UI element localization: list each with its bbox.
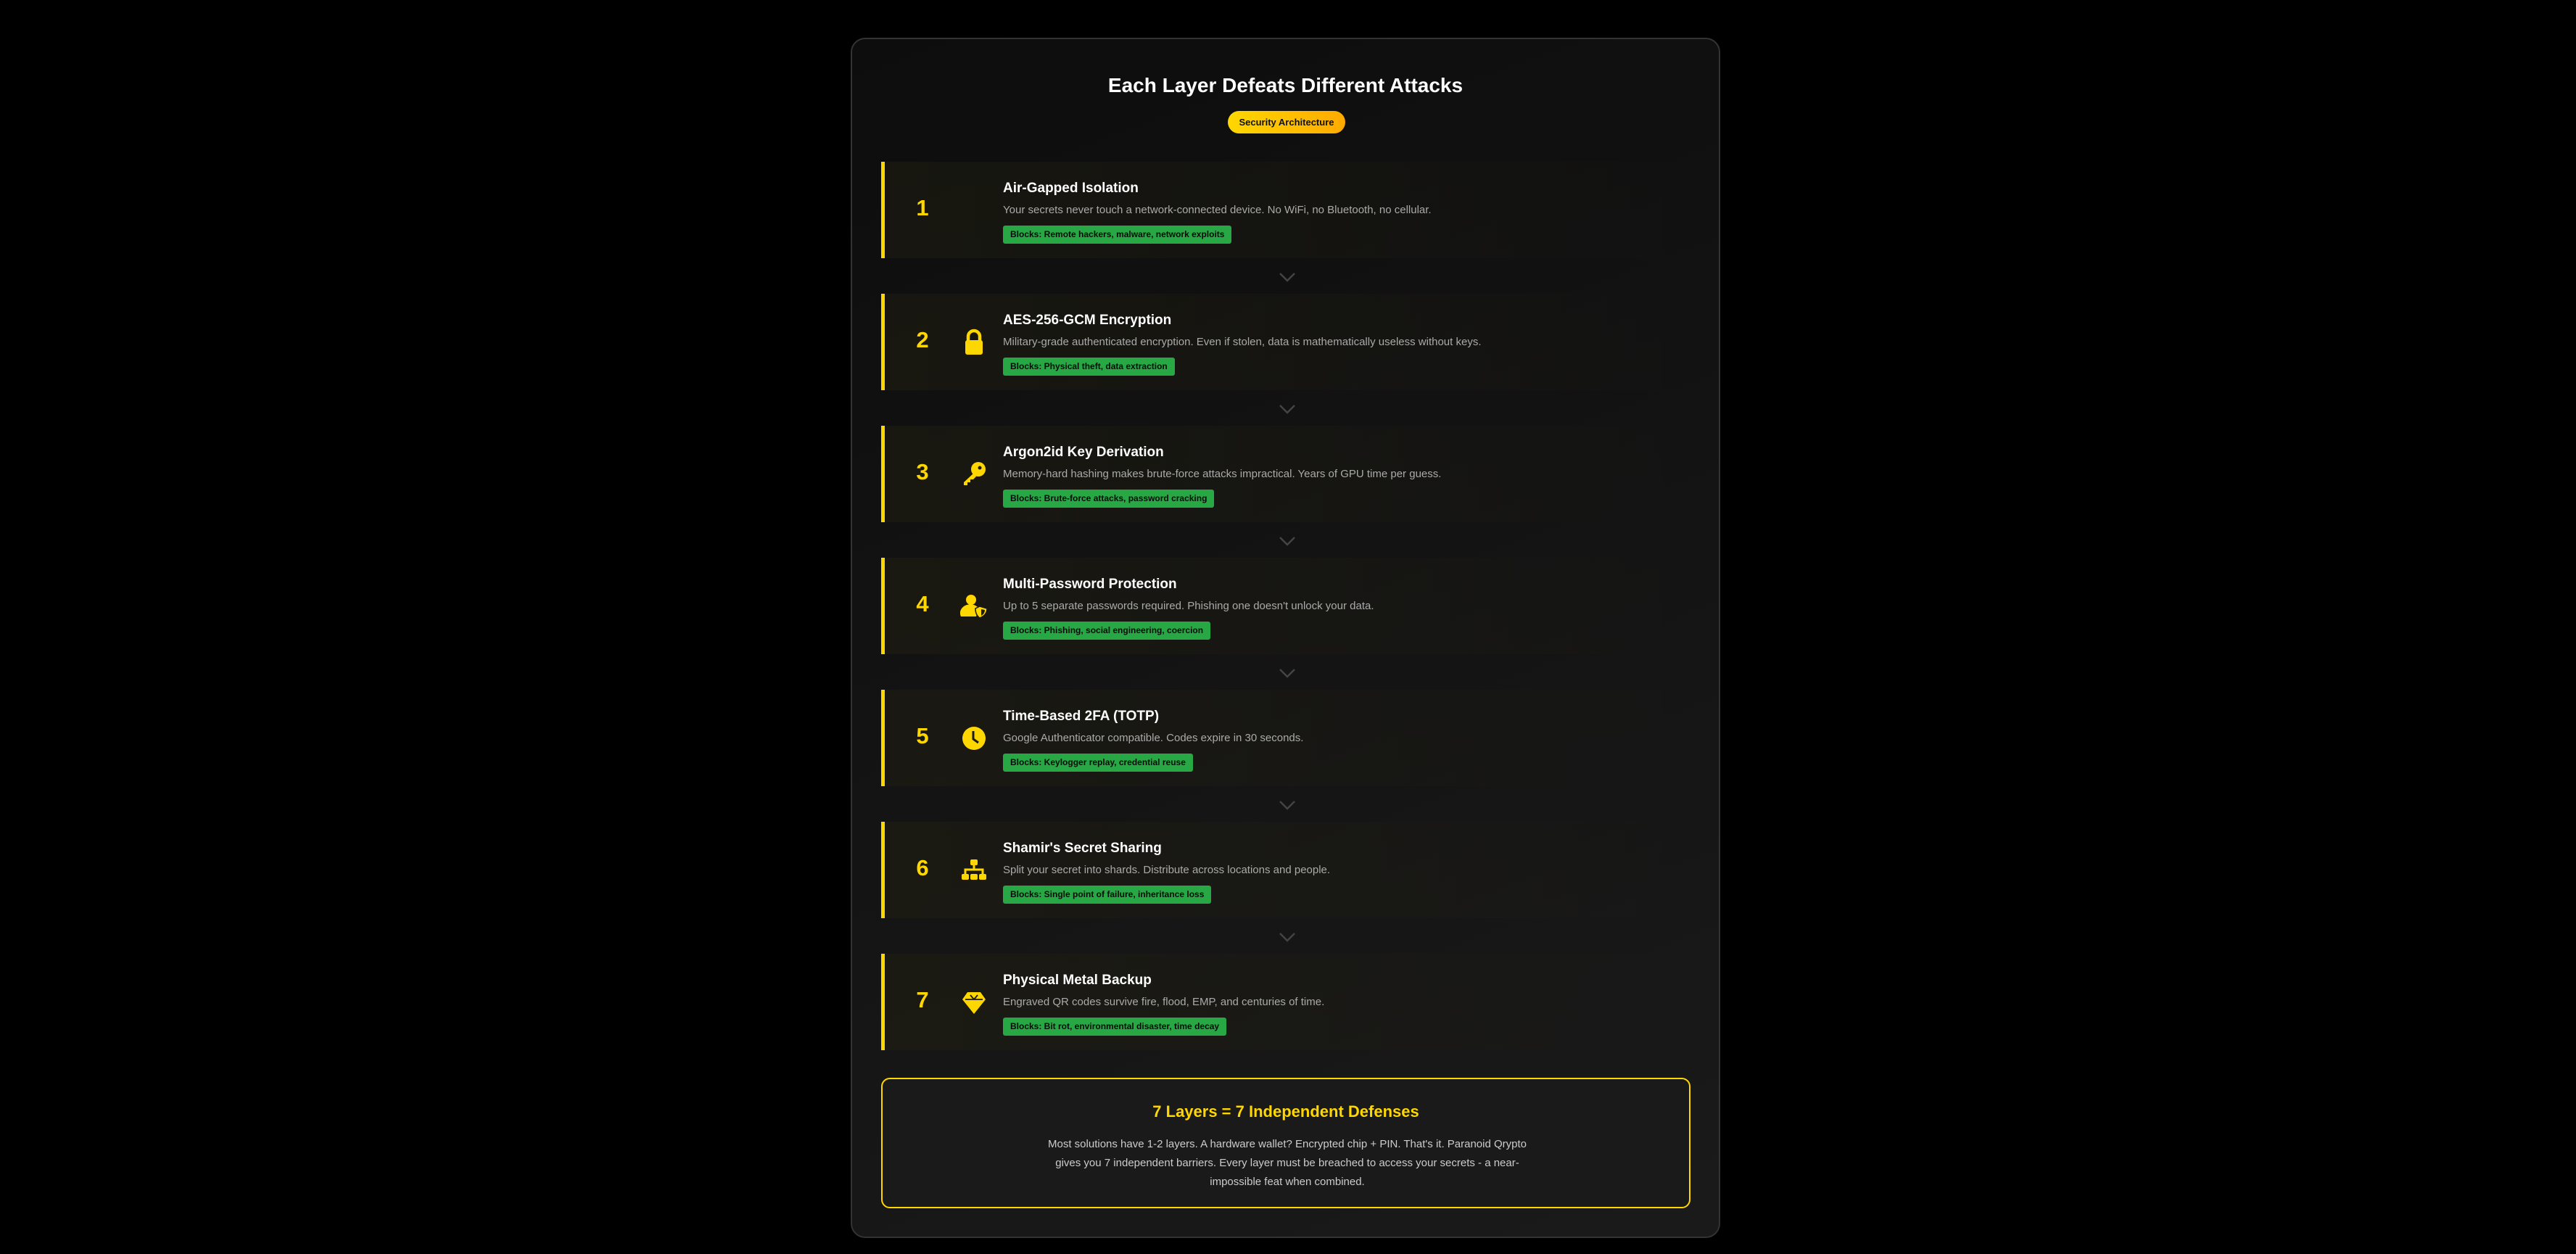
arrow	[1279, 537, 1295, 545]
number 6: 6	[916, 855, 929, 880]
number 3: 3	[916, 459, 929, 484]
layer 4 description: Up to 5 separate passwords required. Phishing one doesn't unlock your data.	[1003, 600, 1374, 612]
layer 1 tag: Blocks: Remote hackers, malware, network exploits	[1010, 229, 1224, 239]
arrow	[1279, 273, 1295, 281]
panel: summary callout	[881, 1078, 1690, 1208]
number 4: 4	[916, 591, 929, 616]
layer 2 tag: Blocks: Physical theft, data extraction	[1010, 361, 1168, 371]
arrow	[1279, 405, 1295, 413]
layer 5 tag	[1003, 754, 1193, 772]
arrow	[1279, 801, 1295, 809]
layer 2 description: Military-grade authenticated encryption. Even if stolen, data is mathematically useless without keys.	[1003, 336, 1481, 348]
layer 5 tag: Blocks: Keylogger replay, credential reuse	[1010, 757, 1186, 767]
icon: key	[964, 462, 986, 485]
layer 3 description: Memory-hard hashing makes brute-force attacks impractical. Years of GPU time per guess.	[1003, 468, 1441, 480]
badge	[1228, 111, 1345, 133]
layer 3 title: Argon2id Key Derivation	[1003, 445, 1164, 460]
layer 6	[881, 822, 1661, 918]
layer 3 tag: Blocks: Brute-force attacks, password cracking	[1010, 493, 1207, 503]
title: Each Layer Defeats Different Attacks	[1108, 74, 1463, 96]
layer 4 title: Multi-Password Protection	[1003, 577, 1177, 592]
layer 3	[881, 426, 1661, 522]
badge: Security Architecture	[1239, 117, 1334, 128]
layer 7 tag: Blocks: Bit rot, environmental disaster, time decay	[1010, 1021, 1219, 1031]
arrow	[1279, 933, 1295, 941]
layer 7 description: Engraved QR codes survive fire, flood, EMP, and centuries of time.	[1003, 996, 1324, 1008]
layer 2 tag	[1003, 358, 1175, 376]
layer 2 title: AES-256-GCM Encryption	[1003, 313, 1171, 328]
layer 5 title: Time-Based 2FA (TOTP)	[1003, 709, 1159, 724]
summary title: 7 Layers = 7 Independent Defenses	[1152, 1102, 1419, 1121]
layer 6 title: Shamir's Secret Sharing	[1003, 841, 1162, 856]
layer 3 tag	[1003, 490, 1214, 508]
summary body: Most solutions have 1-2 layers. A hardware wallet? Encrypted chip + PIN. That's it. Paranoid Qrypto gives you 7 independent barriers. Every layer must be breached to access your secrets - a near-impossible feat when combined.	[1048, 1138, 1527, 1188]
icon: user shield	[960, 595, 988, 618]
number 2: 2	[916, 327, 929, 352]
layer 1 title: Air-Gapped Isolation	[1003, 181, 1139, 196]
layer 6 description: Split your secret into shards. Distribute across locations and people.	[1003, 864, 1330, 876]
icon: gem	[962, 992, 986, 1014]
arrow	[1279, 669, 1295, 677]
icon: clock	[962, 727, 986, 750]
layer 1 description: Your secrets never touch a network-connected device. No WiFi, no Bluetooth, no cellular.	[1003, 204, 1432, 216]
layer 1 tag	[1003, 226, 1231, 244]
number 7: 7	[916, 987, 929, 1012]
layer 7 title: Physical Metal Backup	[1003, 973, 1152, 988]
layer 6 tag	[1003, 886, 1211, 904]
panel: main card	[851, 38, 1720, 1238]
layer 4 tag: Blocks: Phishing, social engineering, coercion	[1010, 625, 1203, 635]
layer 4	[881, 558, 1661, 654]
number 1: 1	[916, 195, 929, 220]
layer 5	[881, 690, 1661, 786]
icon: lock	[965, 329, 983, 355]
icon: hierarchy	[962, 859, 986, 880]
layer 4 tag	[1003, 622, 1210, 640]
layer 7 tag	[1003, 1018, 1226, 1036]
layer 6 tag: Blocks: Single point of failure, inheritance loss	[1010, 889, 1204, 899]
layer 1	[881, 162, 1661, 258]
number 5: 5	[916, 723, 929, 748]
layer 5 description: Google Authenticator compatible. Codes expire in 30 seconds.	[1003, 732, 1303, 744]
layer 7	[881, 954, 1661, 1050]
layer 2	[881, 294, 1661, 390]
